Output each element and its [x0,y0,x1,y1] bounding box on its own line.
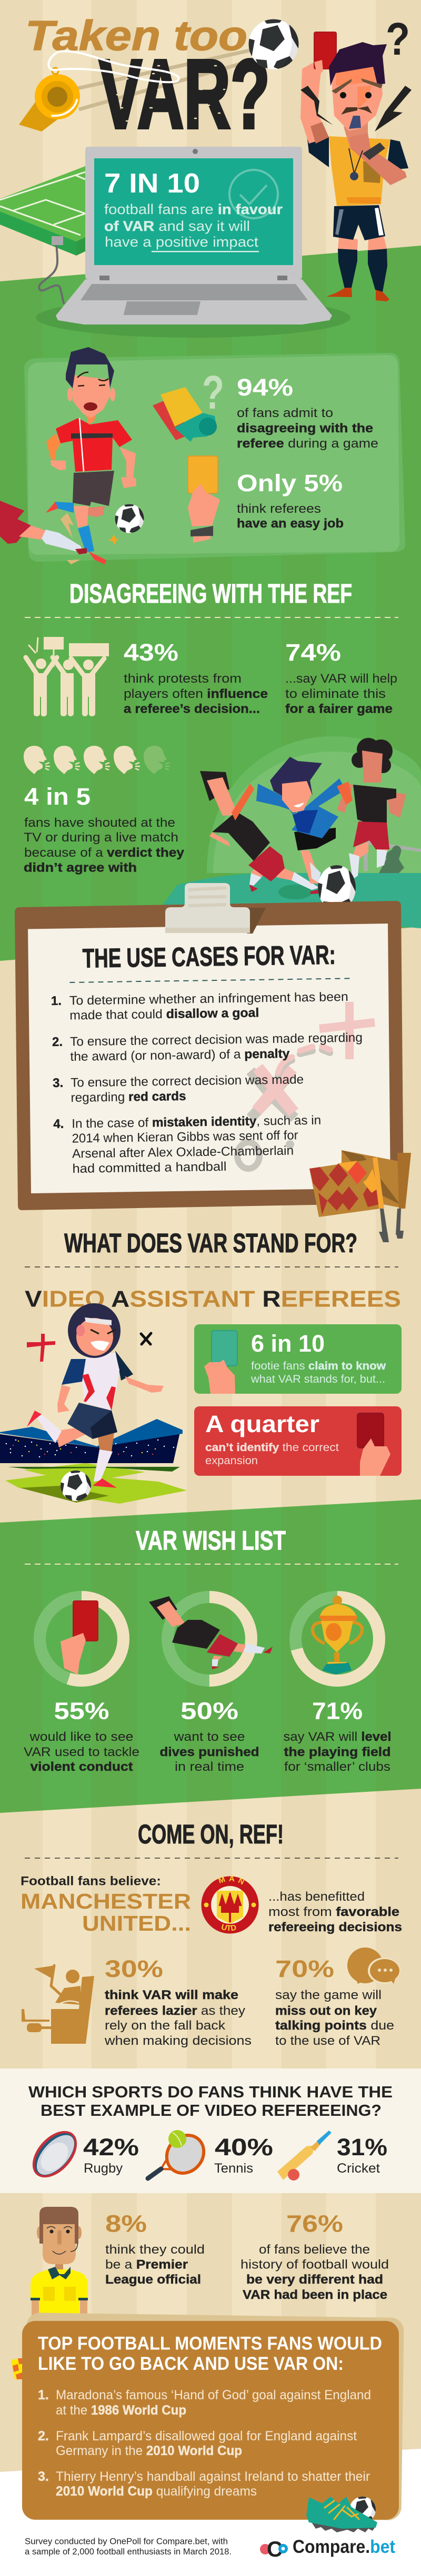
stat: 76% [240,2210,389,2302]
stat: 94%: 94% [237,374,293,401]
icon: question mark: ? [386,14,410,65]
use case 2: the award (or non-award) of a penalty [70,1047,290,1064]
panel: fan disagreement [0,347,405,564]
illustration: referee with red card [300,32,412,301]
moment 2 [38,2429,357,2458]
use case 2: To ensure the correct decision was made regarding [70,1031,363,1049]
stat: 4 in 5 [24,783,185,875]
use case 1: 1. [51,994,62,1008]
stat: only 5%: Only 5% [237,470,343,496]
icon: referee in armchair [22,1965,94,2044]
panel heading [38,2333,382,2374]
callout: 6 in 10 [194,1324,402,1394]
stat: 4 in 5: 4 in 5 [24,783,91,810]
stat: 30%: rely on the fall back [105,2019,226,2033]
moment 1: at the 1986 World Cup [56,2403,186,2418]
stat: 4 in 5: TV or during a live match [24,830,178,845]
use case 1: To determine whether an infringement has been [69,990,348,1008]
use case 4 [53,1113,322,1176]
stat: 30% [104,1955,252,2048]
text: has benefitted: refereeing decisions [268,1920,402,1934]
stat: 8% [105,2210,205,2287]
moment 1: 1. [38,2388,49,2402]
heading: which sports [28,2083,393,2119]
stat: 43%: 43% [124,639,178,666]
illustration: pitch on screen with cable [0,166,85,304]
laptop shadow [36,298,350,338]
callout: 6 in 10: 6 in 10 [251,1330,325,1357]
title: Taken too: Taken too [25,12,247,59]
laptop with stat [56,147,332,324]
panel: top football moments [11,2313,404,2520]
illustration: match official [31,2207,88,2325]
use case 4: Arsenal after Alex Oxlade-Chamberlain [72,1143,294,1161]
panel heading: TOP FOOTBALL MOMENTS FANS WOULD [38,2333,382,2354]
stat: rugby: Rugby [84,2161,123,2176]
survey note: a sample of 2,000 football enthusiasts in March 2018. [25,2547,232,2557]
icon: red plus [27,1334,55,1362]
icon: club badge [201,1875,259,1933]
icon: speech bubbles [347,1948,400,1984]
stat: 55%: would like to see [29,1730,133,1744]
stat: 4 in 5: fans have shouted at the [24,816,175,830]
icon: rugby ball [24,2123,86,2186]
icon: football [60,1470,96,1502]
stat: 76%: 76% [286,2210,343,2237]
illustration: fouled player [0,347,136,564]
icon: club badge: MAN [218,1875,245,1885]
stat: 43%: think protests from [124,672,242,686]
icon: small checkered flag [11,2358,22,2379]
stat: 76%: history of football would [240,2257,389,2272]
panel: clipboard use cases [15,883,404,1210]
survey note: Survey conducted by OnePoll for Compare.bet, with [25,2536,228,2547]
text: Manchester United [21,1889,191,1935]
stat: 55% [24,1698,139,1774]
stat: 94%: disagreeing with the [237,421,373,435]
callout: 6 in 10: what VAR stands for, but... [250,1373,385,1385]
stat: 70%: say the game will [275,1988,382,2002]
stat: 30%: when making decisions [104,2034,252,2048]
moment 3: 3. [38,2469,49,2484]
use case 4: In the case of mistaken identity, such as in [72,1113,321,1131]
use case 3: To ensure the correct decision was made [71,1072,304,1090]
stat: 50%: 50% [181,1698,238,1724]
moment 2: 2. [38,2429,49,2443]
logo: Compare.bet: C [267,2537,283,2561]
text: has benefitted: ...has benefitted [268,1890,365,1904]
stat: 74%: to eliminate this [285,687,386,701]
moment 1 [38,2388,371,2418]
stat: 94%: of fans admit to [237,406,333,420]
use case 4: 2014 when Kieran Gibbs was sent off for [72,1128,298,1145]
stat: 43%: a referee’s decision... [124,702,260,716]
stat: 74%: ...say VAR will help [285,672,397,686]
laptop body [56,147,332,324]
icon: teal card in hand [204,1331,237,1394]
logo: Compare.bet [260,2537,395,2561]
stat: 30%: referees lazier as they [105,2004,245,2018]
stat: 70%: talking points due [275,2019,394,2033]
stat: only 5% [237,470,344,531]
paper [28,924,390,1193]
callout: a quarter [194,1406,402,1476]
stat: 70% [275,1955,394,2048]
text: Manchester United: UNITED... [82,1911,191,1935]
stat: 55%: VAR used to tackle [24,1745,139,1759]
panel heading: LIKE TO GO BACK AND USE VAR ON: [38,2354,344,2374]
clipboard board [15,901,404,1210]
moment 3: Thierry Henry’s handball against Ireland to shatter their [56,2469,370,2484]
stat: cricket: Cricket [337,2161,380,2176]
title: VAR?: VAR? [99,40,270,149]
stat: 50%: dives punished [160,1745,259,1759]
icon: football boots [306,2496,380,2532]
stat: 8%: think they could [105,2243,205,2257]
stat: tennis: 40% [215,2134,273,2161]
chart: 71% donut [296,1597,379,1681]
stat: 71%: the playing field [284,1745,390,1759]
survey note [25,2536,232,2557]
stat text: football fans are in favour [104,201,283,217]
clip [165,883,266,934]
grass [5,1463,187,1504]
stat text: have a positive impact [105,234,259,250]
stat: 70%: to the use of VAR [275,2034,380,2048]
stat text: of VAR and say it will [104,218,250,234]
moment 3 [38,2469,370,2499]
stat: 50% [160,1698,259,1774]
icon: red card in hand [357,1413,390,1476]
icon: whistle [19,51,179,131]
stat: 94% [237,374,378,451]
chart: 55% donut [40,1597,123,1681]
icon: football in flight [248,18,306,70]
heading: VAR wish list: VAR WISH LIST [136,1525,286,1556]
text: football fans believe: Football fans believe: [21,1874,161,1888]
heading: which sports: BEST EXAMPLE OF VIDEO REFEREEING? [41,2101,382,2119]
stat: only 5%: have an easy job [237,516,344,531]
use case 3: 3. [53,1076,63,1090]
chart: 50% donut [167,1597,252,1681]
icon: yellow card in hand [188,456,220,543]
stat: 50%: want to see [173,1730,245,1744]
stat: 76%: VAR had been in place [243,2288,387,2302]
icon: linesman flags [309,1150,411,1242]
icon: tennis racket and ball [148,2128,212,2181]
stat: 43% [124,639,268,716]
use case 4: 4. [53,1117,64,1131]
stat: 50%: in real time [175,1760,244,1774]
left player [200,771,321,894]
callout: a quarter: A quarter [205,1411,319,1437]
illustration: angry female player [0,1303,187,1504]
stat: 74%: for a fairer game [285,702,393,716]
stat: 4 in 5: because of a verdict they [24,846,185,860]
heading: which sports: WHICH SPORTS DO FANS THINK HAVE THE [28,2083,393,2101]
stat: 8%: 8% [105,2210,147,2237]
icon: lightning bolts [300,86,412,131]
stat: 71% [283,1698,392,1774]
callout: a quarter: expansion [205,1455,258,1467]
clipboard text [50,939,365,1176]
use case 4: had committed a handball [72,1160,227,1176]
icon: football [114,503,148,534]
callout: a quarter: can’t identify the correct [205,1442,339,1454]
moment 2: Frank Lampard’s disallowed goal for England against [56,2429,357,2443]
moment 1: Maradona’s famous ‘Hand of God’ goal against England [56,2388,371,2402]
icon: cricket bat and ball [277,2131,332,2181]
title: VAR? [99,40,270,149]
moment 2: Germany in the 2010 World Cup [56,2443,242,2458]
use case 2 [52,1031,363,1064]
stat: 76%: of fans believe the [259,2243,370,2257]
stat: 55%: 55% [54,1698,109,1724]
stat: only 5%: think referees [237,502,321,516]
icon: club badge: UTD [222,1924,236,1931]
right player [337,738,406,879]
stat: 74% [285,639,397,716]
stadium [0,1419,183,1463]
icon: black cross [141,1333,151,1344]
centre player [256,757,353,884]
stat: tennis: Tennis [214,2161,253,2176]
stat: 71%: say VAR will level [283,1730,392,1744]
stat: 76%: be very different had [246,2273,383,2287]
stat: 8%: League official [105,2273,201,2287]
stat: 43%: players often influence [124,687,268,701]
stat: 7 in 10: 7 IN 10 [104,168,200,199]
icon: diving player [149,1596,273,1669]
stat text [104,201,283,252]
stat: rugby: 42% [83,2134,139,2161]
stat: 30%: think VAR will make [105,1988,238,2002]
stat: 8%: be a Premier [105,2257,188,2272]
icon: big football [317,864,362,911]
stat: 55%: violent conduct [31,1760,133,1774]
stat: rugby [83,2134,139,2176]
text: Manchester United: MANCHESTER [21,1889,191,1913]
ball motion trail [73,50,250,109]
stat: tennis [214,2134,273,2176]
use case 1: made that could disallow a goal [69,1006,259,1022]
icon: cards and whistle [153,387,217,442]
logo: Compare.bet: Compare.bet [293,2537,395,2557]
stat: 70%: miss out on key [275,2004,377,2018]
check mark [229,170,278,218]
use case 1 [51,990,348,1023]
text: has benefitted [268,1890,402,1934]
icon: pale question mark: ? [202,367,224,419]
icon: trophy [313,1596,362,1675]
stat: cricket [337,2134,387,2176]
callout: 6 in 10: footie fans claim to know [251,1360,386,1372]
stat: 74%: 74% [285,639,341,666]
use case 2: 2. [52,1035,63,1049]
moment 3: 2010 World Cup qualifying dreams [56,2484,257,2499]
heading: come on, ref: COME ON, REF! [138,1819,284,1849]
icon: protesting players [26,637,109,716]
use case 3 [53,1072,304,1105]
icon: red card in hand [61,1601,98,1675]
stat: cricket: 31% [337,2134,387,2161]
use case 3: regarding red cards [71,1089,186,1105]
stat: 30%: 30% [105,1955,163,1982]
icon row: 4 of 5 shouting heads [24,746,170,774]
stat: 94%: referee during a game [237,437,378,451]
illustration: players contesting the ball [161,736,421,928]
stat: 71%: for ‘smaller’ clubs [284,1760,390,1774]
stat: 70%: 70% [275,1955,334,1982]
heading: video assistant referees: VIDEO ASSISTANT REFEREES [25,1286,401,1312]
pitch-diagram marks [237,1002,375,1169]
stat: 4 in 5: didn’t agree with [24,860,137,875]
stat: 71%: 71% [312,1698,363,1724]
text: has benefitted: most from favorable [268,1905,399,1919]
